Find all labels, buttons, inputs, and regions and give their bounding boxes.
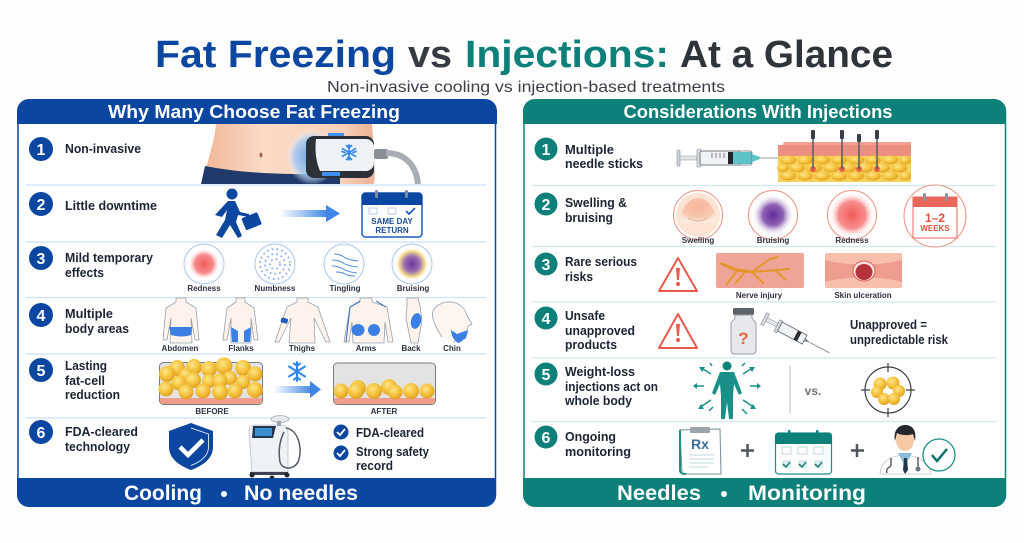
panel footer: Needles: [617, 482, 701, 505]
icon: unknown vial: [731, 308, 756, 354]
label 3: [65, 251, 153, 280]
row 3: rare serious risks: [534, 252, 902, 300]
icon: redness: [828, 190, 876, 245]
panel footer: [17, 478, 496, 507]
checklist: strong safety record: [334, 445, 429, 473]
icon: tingling: Tingling: [330, 284, 361, 293]
icon: flanks figure: [223, 298, 258, 353]
label 4: unapproved: [565, 324, 635, 338]
badge 2: [29, 192, 53, 216]
row 6: ongoing monitoring: [534, 425, 955, 474]
label 1: Non-invasive: [65, 142, 141, 156]
icon: syringe: [677, 149, 786, 167]
row 5: weight-loss injections: [534, 362, 915, 419]
divider and vs.: vs.: [805, 384, 821, 398]
badge 1: 1: [37, 142, 46, 159]
panel: considerations with injections: [523, 99, 1006, 507]
icon: arms figure: [344, 298, 393, 353]
icon: 1-2 weeks calendar: 1–2: [925, 211, 945, 225]
badge 6: 6: [37, 425, 46, 442]
icon: same day return calendar: RETURN: [375, 226, 409, 235]
icon: whole body figure with arrows: [693, 362, 761, 419]
badge 4: 4: [37, 308, 46, 325]
label 1: needle sticks: [565, 157, 643, 171]
icon: snowflake: [342, 145, 356, 160]
checklist: strong safety record: record: [356, 459, 393, 473]
badge 4: [29, 303, 53, 327]
row 2: little downtime: [29, 188, 422, 238]
badge 1: 1: [542, 142, 551, 159]
panel footer: [523, 478, 1006, 507]
title: vs: [408, 34, 452, 76]
label 3: effects: [65, 266, 104, 280]
subtitle: Non-invasive cooling vs injection-based treatments: [327, 79, 725, 96]
plus: [851, 444, 864, 457]
icon: targeted fat cells: [861, 363, 915, 417]
badge 5: [534, 362, 558, 386]
label 4: Unsafe: [565, 309, 605, 323]
label 6: [65, 425, 138, 454]
row 1: multiple needle sticks: [534, 130, 911, 182]
icon: tingling: [324, 244, 364, 293]
icon: monitoring calendar: [775, 430, 832, 474]
label 3: risks: [565, 270, 593, 284]
icon: prescription clipboard: [680, 427, 721, 474]
icon: 1-2 weeks calendar: WEEKS: [920, 224, 950, 233]
after fat diagram: [334, 363, 436, 416]
icon: bruising: [748, 190, 798, 245]
panel header: Considerations With Injections: [624, 102, 892, 122]
label 3: Rare serious: [565, 255, 637, 269]
label 5: whole body: [564, 394, 632, 408]
icon: cooling machine: [249, 416, 300, 480]
title: Injections:: [465, 34, 669, 76]
icon: skin ulceration: [825, 253, 902, 300]
badge 3: 3: [37, 251, 46, 268]
label 2: Swelling &: [565, 196, 627, 210]
checklist: fda-cleared: [334, 424, 424, 440]
icon: thighs figure: [275, 298, 330, 353]
title: [155, 34, 893, 76]
icon: warning triangle: [659, 258, 697, 291]
row 5: lasting fat-cell reduction: [29, 358, 436, 416]
label 5: Lasting: [65, 359, 107, 373]
badge 4: [534, 306, 558, 330]
badge 5: 5: [542, 367, 551, 384]
label 4: Multiple: [65, 307, 113, 321]
badge 2: 2: [37, 197, 46, 214]
divider and vs.: [790, 366, 821, 414]
badge 5: 5: [37, 363, 46, 380]
panel header: [523, 99, 1006, 124]
icon: arms figure: Arms: [356, 344, 377, 353]
label 6: [565, 430, 631, 459]
label 5: reduction: [65, 388, 120, 402]
label 4: body areas: [65, 322, 129, 336]
label 5: Weight-loss: [565, 365, 635, 379]
before fat diagram: [158, 358, 263, 416]
after fat diagram: AFTER: [371, 407, 398, 416]
icon: numbness: Numbness: [255, 284, 296, 293]
label 5: fat-cell: [65, 374, 105, 388]
icon: bruising: Bruising: [397, 284, 429, 293]
icon: swelling: Swelling: [682, 236, 714, 245]
label 4: products: [565, 338, 617, 352]
badge 6: [534, 426, 558, 448]
icon: doctor with check: [880, 425, 955, 474]
label 5: injections act on: [565, 380, 658, 394]
checklist: fda-cleared: FDA-cleared: [356, 426, 424, 440]
icon: nerve injury: [716, 253, 804, 300]
row 2: swelling and bruising: [534, 185, 966, 247]
icon: shield check: [169, 423, 213, 470]
icon: torso with cooling device: [201, 124, 418, 185]
arrow: [280, 205, 340, 222]
row 4: unsafe unapproved products: [534, 306, 948, 359]
icon: redness: Redness: [835, 236, 869, 245]
icon: chin head: [433, 302, 472, 353]
icon: back figure: Back: [401, 344, 421, 353]
icon: skin layers with needles: [777, 130, 911, 182]
icon: same day return calendar: SAME DAY: [371, 217, 413, 226]
panel footer: No needles: [244, 482, 358, 505]
icon: same day return calendar: [362, 190, 422, 237]
icon: thighs figure: Thighs: [289, 344, 316, 353]
badge 1: [534, 138, 558, 160]
icon: flanks figure: Flanks: [228, 344, 254, 353]
label 2: Little downtime: [65, 199, 157, 213]
icon: bruising: [392, 244, 432, 293]
icon: redness: [184, 244, 224, 293]
before fat diagram: BEFORE: [195, 407, 229, 416]
icon: warning triangle: [659, 314, 697, 348]
caption: unapproved risk: [850, 318, 948, 347]
caption: unapproved risk: Unapproved =: [850, 318, 927, 332]
badge 6: [29, 420, 53, 444]
badge 5: [29, 358, 53, 382]
label 2: [565, 196, 627, 225]
label 1: Multiple: [565, 143, 614, 157]
icon: swelling: [674, 190, 722, 245]
row 1: non-invasive: [29, 124, 418, 185]
row 3: mild temporary effects: [29, 244, 432, 293]
label 6: technology: [65, 440, 130, 454]
badge 3: [534, 252, 558, 276]
badge 2: 2: [542, 197, 551, 214]
label 6: Ongoing: [565, 430, 616, 444]
panel footer: Cooling: [124, 482, 202, 505]
badge 1: [29, 137, 53, 161]
badge 4: 4: [542, 311, 551, 328]
icon: nerve injury: Nerve injury: [736, 291, 783, 300]
panel footer: Monitoring: [748, 482, 866, 505]
icon: syringe diagonal: [761, 313, 832, 359]
icon: bruising: Bruising: [757, 236, 789, 245]
title: Fat Freezing: [155, 34, 396, 76]
label 4: [565, 309, 635, 352]
badge 6: 6: [542, 430, 551, 447]
icon: unknown vial: ?: [738, 329, 749, 348]
title: At a Glance: [680, 34, 893, 76]
panel header: Why Many Choose Fat Freezing: [108, 102, 400, 122]
badge 3: 3: [542, 257, 551, 274]
icon: numbness: [255, 244, 296, 293]
label 5: [564, 365, 658, 408]
icon: walking person: [215, 188, 262, 238]
label 6: monitoring: [565, 445, 631, 459]
label 3: [565, 255, 637, 284]
row 6: fda-cleared technology: [29, 416, 429, 480]
badge 3: [29, 246, 53, 270]
badge 2: [534, 192, 558, 216]
label 5: [65, 359, 120, 402]
icon: back figure: [401, 298, 423, 353]
label 2: bruising: [565, 211, 613, 225]
panel: why many choose fat freezing: [17, 99, 497, 507]
label 1: [565, 143, 643, 171]
caption: unapproved risk: unpredictable risk: [850, 333, 948, 347]
icon: skin ulceration: Skin ulceration: [834, 291, 892, 300]
icon: prescription clipboard: Rx: [691, 436, 709, 452]
icon: chin head: Chin: [443, 344, 461, 353]
icon: redness: Redness: [187, 284, 221, 293]
label 4: [65, 307, 129, 336]
icon: 1-2 weeks calendar: [904, 185, 966, 247]
panel header: [17, 99, 497, 124]
checklist: strong safety record: Strong safety: [356, 445, 429, 459]
label 3: Mild temporary: [65, 251, 153, 265]
icon: abdomen figure: [162, 298, 199, 353]
plus: [741, 444, 754, 457]
label 6: FDA-cleared: [65, 425, 138, 439]
icon: abdomen figure: Abdomen: [162, 344, 199, 353]
arrow with snowflake: [273, 362, 321, 398]
row 4: multiple body areas: [29, 298, 472, 353]
